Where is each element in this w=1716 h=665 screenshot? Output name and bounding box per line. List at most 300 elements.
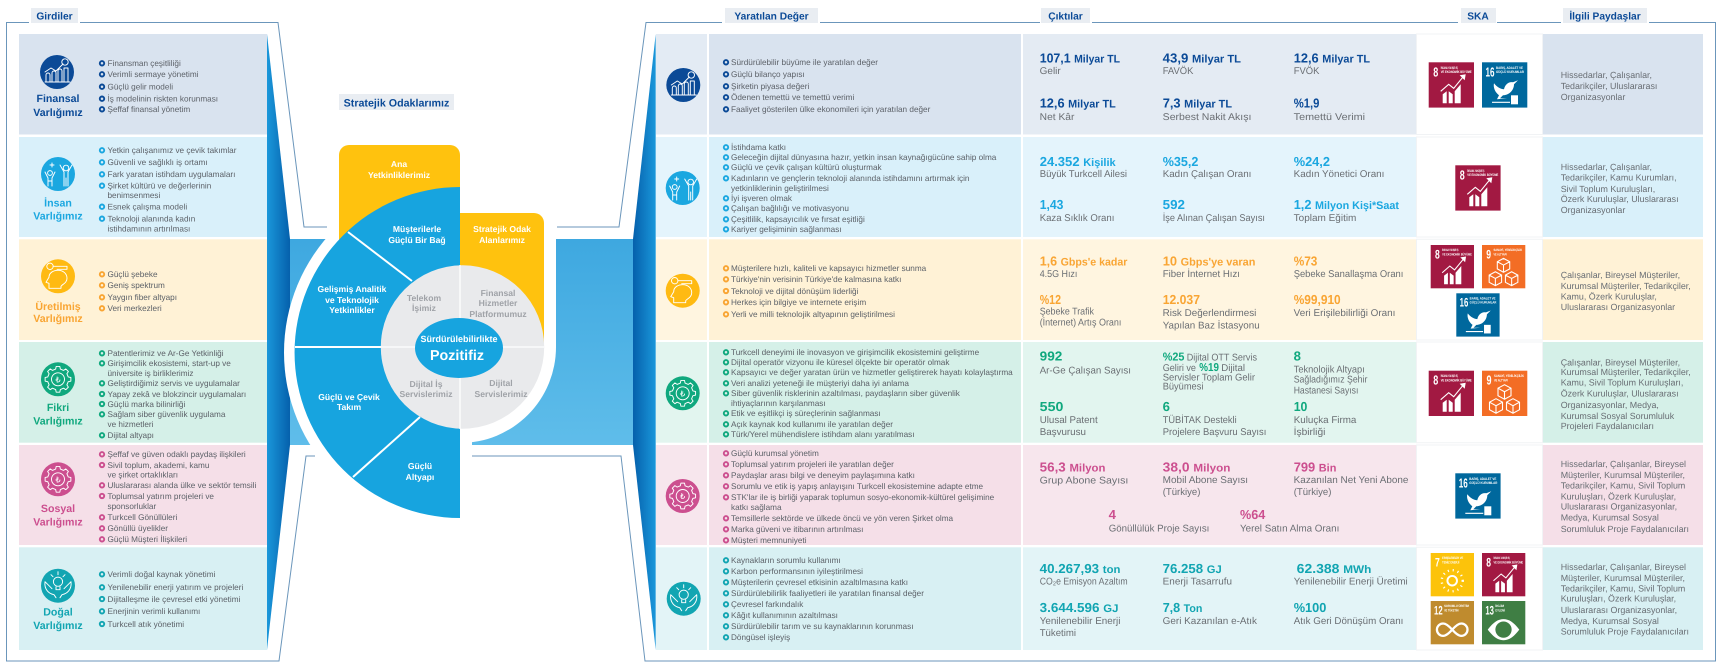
panel: Üretilmiş Varlığımız — [19, 239, 267, 340]
metrics: fikri çıktılar: Geliri ve — [1163, 363, 1197, 374]
metrics: doğal çıktılar: Geri Kazanılan e-Atık — [1163, 616, 1257, 627]
heading: Fikri Varlığımız: Fikri — [47, 402, 69, 414]
list: sosyal yaratılan değer: Temsillerle sektörde ve ülkede öncü ve yön veren Şirket olma — [731, 514, 954, 523]
metrics: üretilmiş çıktılar: %73 — [1294, 254, 1317, 268]
text: paydaşlar finansal: Hissedarlar, Çalışanlar, — [1561, 70, 1652, 80]
heading: İnsan Varlığımız: Varlığımız — [33, 210, 83, 222]
heading: Finansal Varlığımız: Varlığımız — [33, 107, 83, 119]
list: üretilmiş yaratılan değer — [724, 264, 927, 319]
icon: SKA 7: TEMİZ ENERJİ — [1442, 560, 1459, 564]
metrics: finansal çıktılar: Serbest Nakit Akışı — [1163, 112, 1251, 123]
list: finansal yaratılan değer: Sürdürülebilir büyüme ile yaratılan değer — [731, 58, 878, 67]
list: sosyal girdiler: Turkcell Gönüllüleri — [108, 513, 177, 522]
list: doğal yaratılan değer: Döngüsel işleyiş — [731, 633, 790, 642]
header: İlgili Paydaşlar: İlgili Paydaşlar — [1569, 10, 1641, 22]
list: doğal girdiler: Yenilenebilir enerji yatırım ve projeleri — [108, 583, 243, 592]
metrics: insan çıktılar: %35,2 — [1163, 154, 1198, 169]
metrics: finansal çıktılar: 12,6 Milyar TL — [1040, 96, 1116, 110]
arrow: right wedge — [633, 34, 656, 650]
icon: fikri: ₺ — [55, 375, 61, 384]
list: finansal girdiler: Şeffaf finansal yönetim — [108, 105, 190, 114]
label: Gelişmiş Analitik ve Teknolojik Yetkinlikler: Gelişmiş Analitik — [318, 284, 387, 294]
icon: SKA 12: SORUMLU ÜRETİM — [1444, 604, 1469, 608]
metrics: doğal çıktılar: Enerji Tasarrufu — [1163, 577, 1232, 588]
list: üretilmiş yaratılan değer: Herkes için bilgiye ve internete erişim — [731, 298, 866, 307]
card: Stratejik Odak Alanlarımız — [460, 213, 544, 347]
icon: SKA 8 — [1431, 245, 1474, 288]
text: paydaşlar doğal: Sorumluluk Proje Faydalanıcıları — [1561, 627, 1689, 637]
list: üretilmiş yaratılan değer: Teknoloji ve dijital dönüşüm liderliği — [731, 287, 859, 296]
metrics: üretilmiş çıktılar: Fiber İnternet Hızı — [1163, 268, 1240, 280]
header: Çıktılar — [1041, 8, 1090, 23]
list: fikri yaratılan değer: Turkcell deneyimi ile inovasyon ve girişimcilik ekosistemini geliştirme — [731, 348, 980, 357]
metrics: fikri çıktılar: Ar-Ge Çalışan Sayısı — [1040, 365, 1131, 376]
heading: Fikri Varlığımız: Varlığımız — [33, 416, 83, 428]
list: doğal yaratılan değer: Kâğıt kullanımının azaltılması — [731, 611, 838, 620]
metrics: üretilmiş çıktılar: 12.037 — [1163, 292, 1200, 307]
list: insan yaratılan değer — [724, 142, 997, 234]
icon: finansal değer — [666, 68, 700, 102]
list: finansal girdiler — [100, 59, 218, 114]
label: Gelişmiş Analitik ve Teknolojik Yetkinlikler: ve Teknolojik — [325, 295, 379, 305]
text: paydaşlar finansal: Organizasyonlar — [1561, 92, 1625, 102]
center: Sürdürülebilirlikte Pozitifiz: Sürdürülebilirlikte — [420, 334, 498, 344]
icon: SKA 8 — [1429, 62, 1474, 108]
list: fikri yaratılan değer: Etik ve eşitlikçi iş süreçlerinin sağlanması — [731, 409, 881, 418]
metrics: finansal çıktılar: 7,3 Milyar TL — [1163, 96, 1232, 110]
metrics: finansal çıktılar: Net Kâr — [1040, 112, 1075, 123]
icon: SKA 16: 16 — [1486, 64, 1494, 79]
list: doğal yaratılan değer: Çevresel farkındalık — [731, 600, 804, 609]
metrics: üretilmiş çıktılar: 10 Gbps'ye varan — [1163, 254, 1256, 268]
header: Yaratılan Değer — [725, 8, 818, 23]
heading: Stratejik Odaklarımız — [339, 94, 454, 110]
list: finansal girdiler: Verimli sermaye yönetimi — [108, 70, 199, 79]
list: insan girdiler: istihdamının artırılması — [108, 224, 190, 234]
icon: SKA 9 — [1482, 371, 1527, 416]
list: sosyal girdiler: Toplumsal yatırım projeleri ve — [108, 492, 214, 501]
icon: SKA 9 — [1482, 245, 1525, 288]
icon: SKA 8: 8 — [1486, 555, 1491, 569]
metrics: insan çıktılar: 24.352 Kişilik — [1040, 154, 1117, 169]
metrics: doğal çıktılar: CO₂e Emisyon Azaltım — [1040, 577, 1128, 588]
list: sosyal yaratılan değer: Marka güveni ve itibarının artırılması — [731, 525, 863, 534]
list: fikri yaratılan değer: Dijital operatör vizyonu ile küresel ölçekte bir operatör olmak — [731, 358, 950, 367]
heading: Stratejik Odaklarımız: Stratejik Odaklarımız — [344, 98, 449, 110]
text: paydaşlar insan: Hissedarlar, Çalışanlar, — [1561, 162, 1652, 172]
text: paydaşlar fikri: Kamu, Sivil Toplum Kuruluşları, — [1561, 378, 1683, 388]
metrics: üretilmiş çıktılar: Risk Değerlendirmesi — [1163, 308, 1256, 319]
header: Girdiler — [31, 8, 78, 23]
text: paydaşlar doğal: Tedarikçiler, Kamu, Sivil Toplum — [1561, 584, 1685, 594]
list: üretilmiş girdiler: Güçlü şebeke — [108, 270, 158, 279]
icon: SKA 8: İNSANA YAKIŞIR İŞ — [1441, 374, 1458, 378]
arrow: left wedge — [267, 34, 290, 650]
text: paydaşlar insan: Sivil Toplum Kuruluşları, — [1561, 184, 1655, 194]
text: paydaşlar doğal: Müşteriler, Kurumsal Müşteriler, — [1561, 573, 1685, 583]
icon: doğal değer — [667, 582, 701, 616]
list: doğal girdiler: Turkcell atık yönetimi — [108, 620, 184, 629]
frame: inputs — [6, 22, 327, 661]
list: sosyal girdiler: Şeffaf ve güven odaklı paydaş ilişkileri — [108, 450, 246, 459]
list: fikri yaratılan değer: ihtiyaçlarının karşılanması — [731, 399, 826, 408]
icon: SKA 16 — [1455, 473, 1501, 519]
list: insan yaratılan değer: Geleceğin dijital dünyasına hazır, yetkin insan kaynağıgücüne sahip olma — [731, 153, 997, 162]
icon: SKA 16: BARIŞ, ADALET VE — [1470, 297, 1496, 300]
icon: SKA 16: GÜÇLÜ KURUMLAR — [1496, 70, 1524, 74]
metrics: insan çıktılar: 592 — [1163, 197, 1185, 212]
metrics: sosyal çıktılar: Yerel Satın Alma Oranı — [1240, 523, 1339, 534]
icon: SKA 9: 9 — [1486, 247, 1491, 261]
card: Ana Yetkinliklerimiz: Ana — [391, 159, 407, 169]
header: SKA — [1461, 8, 1496, 23]
list: sosyal yaratılan değer: katkı sağlama — [731, 503, 782, 512]
list: sosyal yaratılan değer: STK'lar ile iş birliği yaparak toplumun sosyo-ekonomik-kültürel gelişimine — [731, 493, 995, 502]
list: sosyal girdiler — [100, 450, 256, 544]
icon: fikri — [41, 362, 75, 396]
label: Telekom İşimiz: İşimiz — [412, 303, 436, 313]
list: insan girdiler: Yetkin çalışanımız ve çevik takımlar — [108, 146, 237, 155]
metrics: fikri çıktılar: Kuluçka Firma — [1294, 415, 1357, 426]
heading: Doğal Varlığımız: Varlığımız — [33, 620, 83, 632]
panel: İnsan Varlığımız — [19, 137, 267, 237]
metrics: sosyal çıktılar: (Türkiye) — [1163, 487, 1200, 498]
text: paydaşlar fikri: Organizasyonlar, Medya, — [1561, 400, 1659, 410]
metrics: fikri çıktılar: İşbirliği — [1294, 426, 1325, 438]
metrics: finansal çıktılar: %1,9 — [1294, 96, 1319, 110]
metrics: üretilmiş çıktılar: 4.5G Hızı — [1040, 269, 1077, 280]
list: finansal yaratılan değer — [724, 58, 931, 114]
list: insan girdiler: Teknoloji alanında kadın — [108, 214, 196, 224]
icon: SKA 13 — [1482, 601, 1525, 644]
list: insan girdiler: Şirket kültürü ve değerlerinin — [108, 182, 212, 190]
metrics: finansal çıktılar: FAVÖK — [1163, 65, 1194, 77]
metrics: üretilmiş çıktılar: (İnternet) Artış Oranı — [1040, 317, 1121, 329]
label: Finansal Hizmetler Platformumuz: Platformumuz — [469, 309, 527, 319]
text: paydaşlar fikri: Kurumsal Sosyal Sorumluluk — [1561, 411, 1675, 421]
metrics: üretilmiş çıktılar: %99,910 — [1294, 292, 1341, 307]
metrics: sosyal çıktılar: Mobil Abone Sayısı — [1163, 475, 1248, 486]
icon: sosyal değer: ₺ — [680, 492, 685, 501]
icon: SKA 8: VE EKONOMİK BÜYÜME — [1441, 379, 1472, 383]
header: Yaratılan Değer: Yaratılan Değer — [734, 12, 809, 22]
metrics: insan çıktılar: Büyük Turkcell Ailesi — [1040, 169, 1127, 180]
heading: Sosyal Varlığımız: Sosyal — [41, 503, 75, 515]
label: Dijital Servislerimiz: Servislerimiz — [474, 389, 528, 399]
metrics: sosyal çıktılar: 4 — [1109, 507, 1117, 522]
metrics: fikri çıktılar: Dijital — [1221, 363, 1245, 374]
icon: SKA 13: İKLİM — [1495, 604, 1504, 608]
sector: blue half circle — [295, 187, 460, 518]
icon: SKA 8: 8 — [1433, 373, 1438, 388]
icon: üretilmiş değer — [666, 274, 700, 308]
panel: Sosyal Varlığımız — [19, 445, 267, 545]
list: üretilmiş yaratılan değer: Müşterilere hızlı, kaliteli ve kapsayıcı hizmetler sunma — [731, 264, 927, 273]
icon: SKA 9: 9 — [1486, 373, 1492, 388]
list: insan girdiler: Güvenli ve sağlıklı iş ortamı — [108, 158, 208, 167]
list: sosyal yaratılan değer — [724, 449, 995, 545]
icon: SKA 16: BARIŞ, ADALET VE — [1496, 66, 1524, 70]
list: fikri yaratılan değer: Açık kaynak kod kullanımı ile yaratılan değer — [731, 420, 893, 429]
list: fikri girdiler: Patentlerimiz ve Ar-Ge Yetkinliği — [108, 349, 224, 358]
list: fikri girdiler: Yapay zekâ ve blokzincir uygulamaları — [108, 390, 246, 399]
icon: SKA 16: 16 — [1460, 295, 1468, 310]
list: fikri yaratılan değer: Veri analizi yeteneği ile müşteriyi daha iyi anlama — [731, 379, 909, 388]
heading: İnsan Varlığımız: İnsan — [44, 196, 72, 210]
icon: SKA 9: SANAYİ, YENİLİKÇİLİK — [1493, 248, 1523, 252]
list: finansal girdiler: İş modelinin riskten korunması — [108, 94, 218, 104]
icon: SKA 7: 7 — [1435, 555, 1440, 569]
metrics: insan çıktılar: Kaza Sıklık Oranı — [1040, 213, 1114, 224]
list: doğal girdiler — [100, 570, 243, 629]
list: fikri girdiler — [100, 349, 246, 440]
metrics: sosyal çıktılar — [1040, 460, 1409, 534]
row: Fikri değer — [656, 342, 1703, 443]
header: SKA: SKA — [1467, 12, 1489, 22]
list: finansal yaratılan değer: Faaliyet gösterilen ülke ekonomileri için yaratılan değer — [731, 105, 931, 114]
icon: sosyal — [41, 462, 75, 496]
list: sosyal girdiler: Gönüllü üyelikler — [108, 524, 168, 533]
metrics: fikri çıktılar: Hastanesi Sayısı — [1294, 385, 1358, 396]
metrics: finansal çıktılar: 107,1 Milyar TL — [1040, 50, 1120, 66]
list: doğal yaratılan değer: Karbon performansının iyileştirilmesi — [731, 567, 863, 576]
panel: Finansal Varlığımız — [19, 34, 267, 134]
inner circle: business lines — [381, 265, 544, 429]
icon: insan değer — [666, 171, 700, 205]
icon: SKA 9: VE ALTYAPI — [1494, 379, 1508, 383]
metrics: doğal çıktılar: Atık Geri Dönüşüm Oranı — [1294, 616, 1403, 627]
icon: SKA 16 — [1456, 293, 1500, 337]
text: paydaşlar üretilmiş: Kamu, Özerk Kuruluşlar, — [1561, 292, 1657, 302]
text: paydaşlar doğal: Hissedarlar, Çalışanlar, Bireysel — [1561, 562, 1686, 572]
band: right connector — [472, 239, 633, 445]
metrics: sosyal çıktılar: Gönüllülük Proje Sayısı — [1109, 523, 1209, 534]
row: Sosyal değer — [656, 445, 1703, 545]
metrics: insan çıktılar: %24,2 — [1294, 154, 1330, 169]
list: fikri girdiler: Güçlü marka bilinirliği — [108, 400, 185, 409]
list: sosyal girdiler: sponsorluklar — [108, 502, 156, 511]
text: paydaşlar üretilmiş: Çalışanlar, Bireysel Müşteriler, — [1561, 270, 1680, 280]
metrics: insan çıktılar: 1,43 — [1040, 197, 1063, 212]
metrics: üretilmiş çıktılar: Yapılan Baz İstasyonu — [1163, 319, 1260, 331]
icon: SKA 8: 8 — [1435, 247, 1440, 261]
icon: SKA 16 — [1482, 62, 1527, 108]
text: paydaşlar sosyal: Sorumluluk Proje Faydalanıcıları — [1561, 524, 1689, 534]
icon: SKA 8: 8 — [1433, 64, 1438, 79]
metrics: fikri çıktılar: Büyümesi — [1163, 382, 1203, 392]
row: Doğal değer — [656, 547, 1703, 650]
list: fikri yaratılan değer — [724, 348, 1013, 439]
metrics: fikri çıktılar: %19 — [1199, 362, 1219, 374]
list: üretilmiş girdiler: Yaygın fiber altyapı — [108, 293, 177, 302]
list: üretilmiş girdiler: Veri merkezleri — [108, 304, 162, 313]
icon: SKA 8: 8 — [1460, 167, 1465, 182]
list: insan yaratılan değer: Çalışan bağlılığı ve motivasyonu — [731, 204, 849, 213]
list: fikri girdiler: üniversite iş birliklerimiz — [108, 369, 194, 378]
diagram: strategic focus wheel — [284, 94, 556, 528]
text: paydaşlar sosyal: Medya, Kurumsal Sosyal — [1561, 513, 1659, 523]
label: Müşterilerle Güçlü Bir Bağ: Güçlü Bir Bağ — [388, 235, 446, 245]
label: Güçlü Altyapı: Güçlü — [408, 461, 432, 471]
list: insan girdiler: benimsenmesi — [108, 191, 160, 200]
metrics: üretilmiş çıktılar: Veri Erişilebilirliği Oranı — [1294, 308, 1395, 319]
center: Sürdürülebilirlikte Pozitifiz: Pozitifiz — [430, 348, 484, 364]
metrics: fikri çıktılar: 6 — [1163, 399, 1170, 414]
text: paydaşlar doğal: Medya, Kurumsal Sosyal — [1561, 616, 1659, 626]
list: sosyal girdiler: Uluslararası alanda ülke ve sektör temsili — [108, 481, 256, 490]
list: insan yaratılan değer: Kariyer gelişiminin sağlanması — [731, 225, 842, 234]
icon: SKA 8 — [1482, 553, 1525, 596]
icon: SKA 8: İNSANA YAKIŞIR İŞ — [1442, 248, 1459, 252]
metrics: doğal çıktılar: Yenilenebilir Enerji Üretimi — [1294, 576, 1408, 588]
label: Müşterilerle Güçlü Bir Bağ: Müşterilerle — [393, 224, 441, 234]
icon: doğal — [41, 569, 75, 603]
list: finansal girdiler: Güçlü gelir modeli — [108, 82, 173, 92]
band: left connector — [290, 239, 350, 445]
label: Telekom İşimiz: Telekom — [407, 293, 441, 303]
metrics: fikri çıktılar: 10 — [1294, 399, 1307, 414]
text: paydaşlar insan: Organizasyonlar — [1561, 205, 1625, 215]
text: paydaşlar doğal: Uluslararası Organizasyonlar, — [1561, 605, 1677, 615]
list: sosyal girdiler: ve şirket ortaklıkları — [108, 470, 178, 480]
label: Finansal Hizmetler Platformumuz: Finansal — [481, 288, 515, 298]
metrics: fikri çıktılar: Başvurusu — [1040, 427, 1086, 438]
icon: SKA 8: VE EKONOMİK BÜYÜME — [1467, 173, 1499, 177]
list: sosyal yaratılan değer: Güçlü kurumsal yönetim — [731, 449, 819, 458]
metrics: doğal çıktılar: 62.388 MWh — [1297, 561, 1372, 576]
list: doğal yaratılan değer — [724, 556, 924, 642]
list: doğal girdiler: Dijitalleşme ile çevresel etki yönetimi — [108, 595, 241, 604]
list: sosyal yaratılan değer: Paydaşlar arası bilgi ve deneyim paylaşımına katkı — [731, 471, 915, 480]
icon: SKA 8: İNSANA YAKIŞIR İŞ — [1441, 66, 1458, 70]
metrics: finansal çıktılar: 12,6 Milyar TL — [1294, 50, 1370, 66]
list: insan girdiler: Esnek çalışma modeli — [108, 202, 187, 212]
icon: SKA 7: ERİŞİLEBİLİR VE — [1442, 556, 1464, 560]
icon: SKA 8: VE EKONOMİK BÜYÜME — [1441, 70, 1472, 74]
metrics: doğal çıktılar: 40.267,93 ton — [1040, 561, 1121, 576]
metrics: fikri çıktılar — [1040, 348, 1368, 438]
metrics: sosyal çıktılar: 56,3 Milyon — [1040, 460, 1106, 474]
list: fikri girdiler: Girişimcilik ekosistemi, start-up ve — [108, 359, 231, 368]
icon: SKA 12: VE TÜKETİM — [1444, 608, 1459, 612]
list: sosyal girdiler: Sivil toplum, akademi, kamu — [108, 461, 210, 470]
list: insan yaratılan değer: yetkinliklerinin geliştirilmesi — [731, 184, 829, 193]
text: paydaşlar fikri: Çalışanlar, Bireysel Müşteriler, — [1561, 357, 1680, 367]
text: paydaşlar fikri: Özerk Kuruluşlar, Uluslararası — [1561, 388, 1679, 398]
row: İnsan değer — [656, 137, 1703, 237]
header: İlgili Paydaşlar — [1563, 8, 1647, 23]
icon: SKA 16: GÜÇLÜ KURUMLAR — [1469, 481, 1498, 485]
list: doğal yaratılan değer: Kaynakların sorumlu kullanımı — [731, 556, 841, 565]
metrics: fikri çıktılar: Ulusal Patent — [1040, 415, 1098, 426]
metrics: üretilmiş çıktılar: Şebeke Sanallaşma Oranı — [1294, 269, 1403, 280]
list: insan yaratılan değer: Çeşitlilik, kapsayıcılık ve fırsat eşitliği — [731, 215, 865, 224]
metrics: fikri çıktılar: 992 — [1040, 348, 1062, 364]
list: finansal yaratılan değer: Güçlü bilanço yapısı — [731, 70, 805, 79]
metrics: doğal çıktılar: %100 — [1294, 600, 1326, 615]
row: Finansal değer — [656, 34, 1703, 134]
icon: SKA 13: EYLEMİ — [1495, 608, 1505, 612]
list: üretilmiş girdiler: Geniş spektrum — [108, 281, 165, 290]
icon: SKA 9: SANAYİ, YENİLİKÇİLİK — [1494, 374, 1524, 378]
list: fikri girdiler: Sağlam siber güvenlik uygulama — [108, 410, 226, 419]
list: fikri yaratılan değer: Kapsayıcı ve değer yaratan ürün ve hizmetler geliştirerek hayatı kolaylaştırma — [731, 368, 1013, 377]
metrics: insan çıktılar: Kadın Çalışan Oranı — [1163, 169, 1251, 180]
icon: SKA 7 — [1431, 553, 1474, 596]
label: Güçlü Altyapı: Altyapı — [406, 472, 434, 482]
icon: insan — [41, 157, 75, 191]
list: üretilmiş girdiler — [100, 270, 177, 313]
panel: Fikri Varlığımız — [19, 342, 267, 443]
metrics: fikri çıktılar: 8 — [1294, 348, 1301, 364]
list: insan yaratılan değer: İyi işveren olmak — [731, 193, 793, 203]
metrics: üretilmiş çıktılar: %12 — [1040, 292, 1061, 307]
icon: SKA 8: İNSANA YAKIŞIR İŞ — [1467, 169, 1485, 173]
text: paydaşlar insan: Özerk Kuruluşlar, Uluslararası — [1561, 194, 1679, 204]
label: Dijital İş Servislerimiz: Servislerimiz — [399, 389, 453, 399]
list: fikri girdiler: Dijital altyapı — [108, 431, 154, 440]
label: Güçlü ve Çevik Takım: Güçlü ve Çevik — [318, 392, 380, 402]
panel: Doğal Varlığımız — [19, 547, 267, 650]
text: paydaşlar sosyal: Tedarikçiler, Kamu, Sivil Toplum — [1561, 481, 1685, 491]
label: Dijital Servislerimiz: Dijital — [489, 378, 513, 388]
list: sosyal girdiler: Güçlü Müşteri İlişkileri — [108, 534, 187, 544]
metrics: insan çıktılar — [1040, 154, 1399, 224]
icon: sosyal: ₺ — [55, 475, 61, 484]
icon: fikri değer: ₺ — [680, 389, 685, 398]
heading: Sosyal Varlığımız: Varlığımız — [33, 516, 83, 528]
icon: SKA 8: VE EKONOMİK BÜYÜME — [1442, 252, 1472, 256]
icon: finansal — [40, 55, 74, 89]
list: insan yaratılan değer: Güçlü ve çevik çalışan kültürü oluşturmak — [731, 163, 883, 172]
metrics: üretilmiş çıktılar: Şebeke Trafik — [1040, 306, 1094, 317]
list: doğal girdiler: Enerjinin verimli kullanımı — [108, 607, 200, 616]
icon: SKA 8: VE EKONOMİK BÜYÜME — [1493, 560, 1524, 564]
list: fikri yaratılan değer: Türk/Yerel mühendislere istihdam alanı yaratılması — [731, 430, 915, 439]
metrics: fikri çıktılar: %25 — [1163, 352, 1185, 364]
list: doğal yaratılan değer: Müşterilerin çevresel etkisinin azaltılmasına katkı — [731, 578, 908, 587]
icon: SKA 16: BARIŞ, ADALET VE — [1469, 477, 1497, 481]
list: insan yaratılan değer: Kadınların ve gençlerin teknoloji alanında istihdamını artırmak için — [731, 174, 970, 183]
text: paydaşlar fikri: Projeleri Faydalanıcıları — [1561, 421, 1654, 431]
sector dividers — [295, 232, 420, 477]
list: fikri yaratılan değer: Siber güvenlik risklerinin azaltılması, paydaşların siber güvenlik — [731, 389, 961, 398]
icon: fikri değer — [666, 376, 700, 410]
icon: SKA 16: 16 — [1459, 475, 1468, 490]
text: paydaşlar fikri: Kurumsal Müşteriler, Tedarikçiler, — [1561, 367, 1691, 377]
metrics: sosyal çıktılar: (Türkiye) — [1294, 487, 1331, 498]
metrics: fikri çıktılar: Servisler Toplam Gelir — [1163, 372, 1256, 384]
icon: SKA 8 — [1429, 371, 1474, 416]
text: paydaşlar sosyal: Kuruluşları, Özerk Kuruluşlar, — [1561, 492, 1676, 502]
card: Ana Yetkinliklerimiz: Yetkinliklerimiz — [368, 170, 430, 180]
icon: SKA 12 — [1431, 601, 1474, 644]
heading: Üretilmiş Varlığımız: Varlığımız — [33, 313, 83, 325]
center: Sürdürülebilirlikte Pozitifiz — [415, 318, 503, 378]
list: doğal yaratılan değer: Sürdürülebilir tarım ve su kaynaklarının korunması — [731, 622, 913, 631]
label: Finansal Hizmetler Platformumuz: Hizmetler — [479, 298, 518, 308]
list: fikri girdiler: ve hizmetleri — [108, 420, 154, 429]
icon: üretilmiş — [41, 259, 75, 293]
frame: outputs — [472, 22, 1716, 661]
icon: SKA 13: 13 — [1485, 603, 1494, 617]
text: paydaşlar üretilmiş: Uluslararası Organizasyonlar — [1561, 302, 1675, 312]
metrics: insan çıktılar: 1,2 Milyon Kişi*Saat — [1294, 197, 1399, 212]
heading: Üretilmiş Varlığımız: Üretilmiş — [35, 300, 81, 313]
list: üretilmiş yaratılan değer: Türkiye'nin verisinin Türkiye'de kalmasına katkı — [731, 275, 901, 284]
list: doğal yaratılan değer: Sürdürülebilirlik faaliyetleri ile yaratılan finansal değer — [731, 589, 924, 598]
text: paydaşlar doğal: Kuruluşları, Özerk Kuruluşlar, — [1561, 594, 1676, 604]
